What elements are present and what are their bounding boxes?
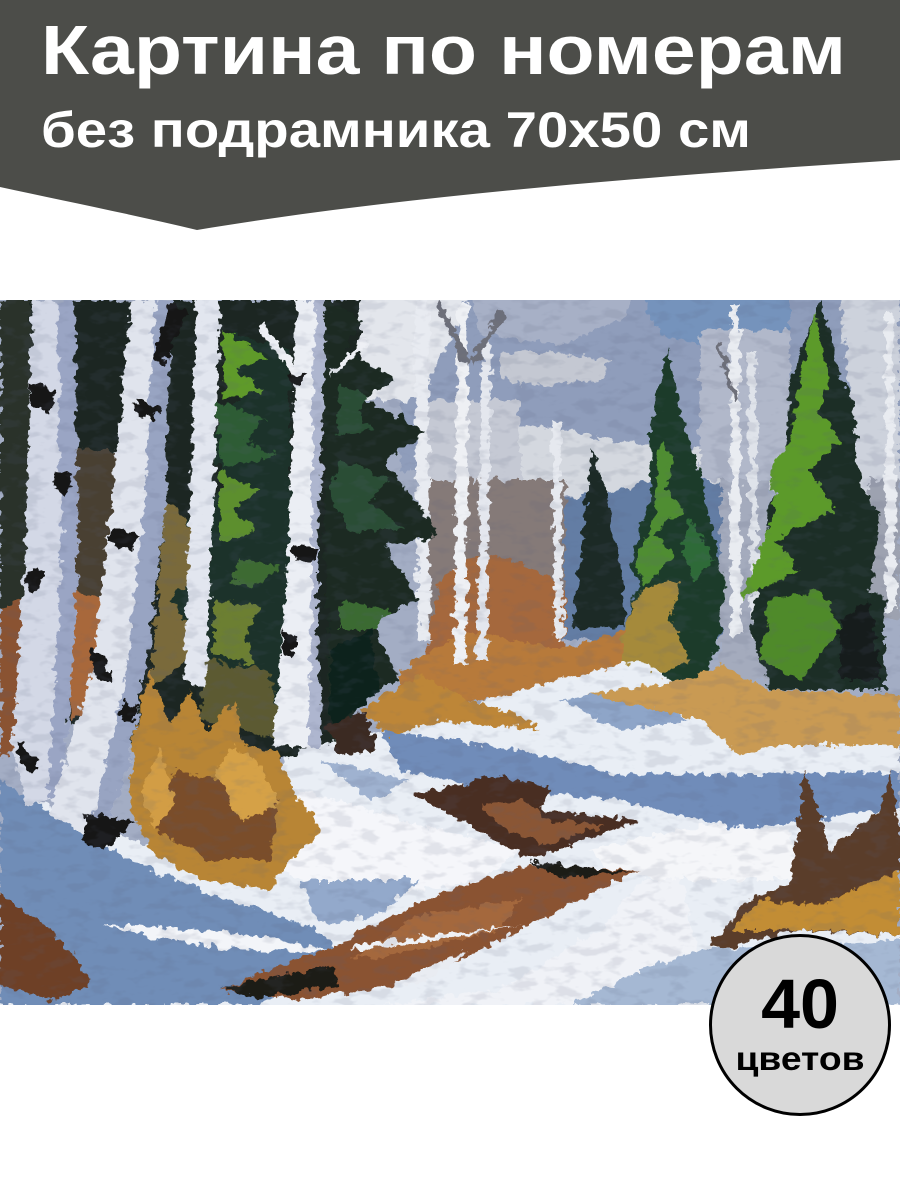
painting: winter birch forest (0, 290, 900, 1010)
paint texture (0, 300, 900, 1005)
sky and clouds (356, 300, 900, 641)
color count badge (710, 936, 890, 1114)
title: Картина по номерам (41, 11, 846, 89)
spruce left (170, 300, 440, 760)
right spruces (572, 300, 885, 700)
birch trunks (12, 300, 368, 850)
stream (220, 775, 640, 1000)
number of colors: 40 (761, 965, 839, 1043)
colors label: цветов (736, 1040, 864, 1077)
subtitle: без подрамника 70х50 см (41, 102, 751, 158)
grass clumps (0, 665, 900, 1000)
snow ground (0, 660, 900, 1010)
dark left forest backdrop (0, 300, 360, 760)
header banner (0, 0, 900, 230)
far birch trees and brown brush (400, 300, 896, 705)
